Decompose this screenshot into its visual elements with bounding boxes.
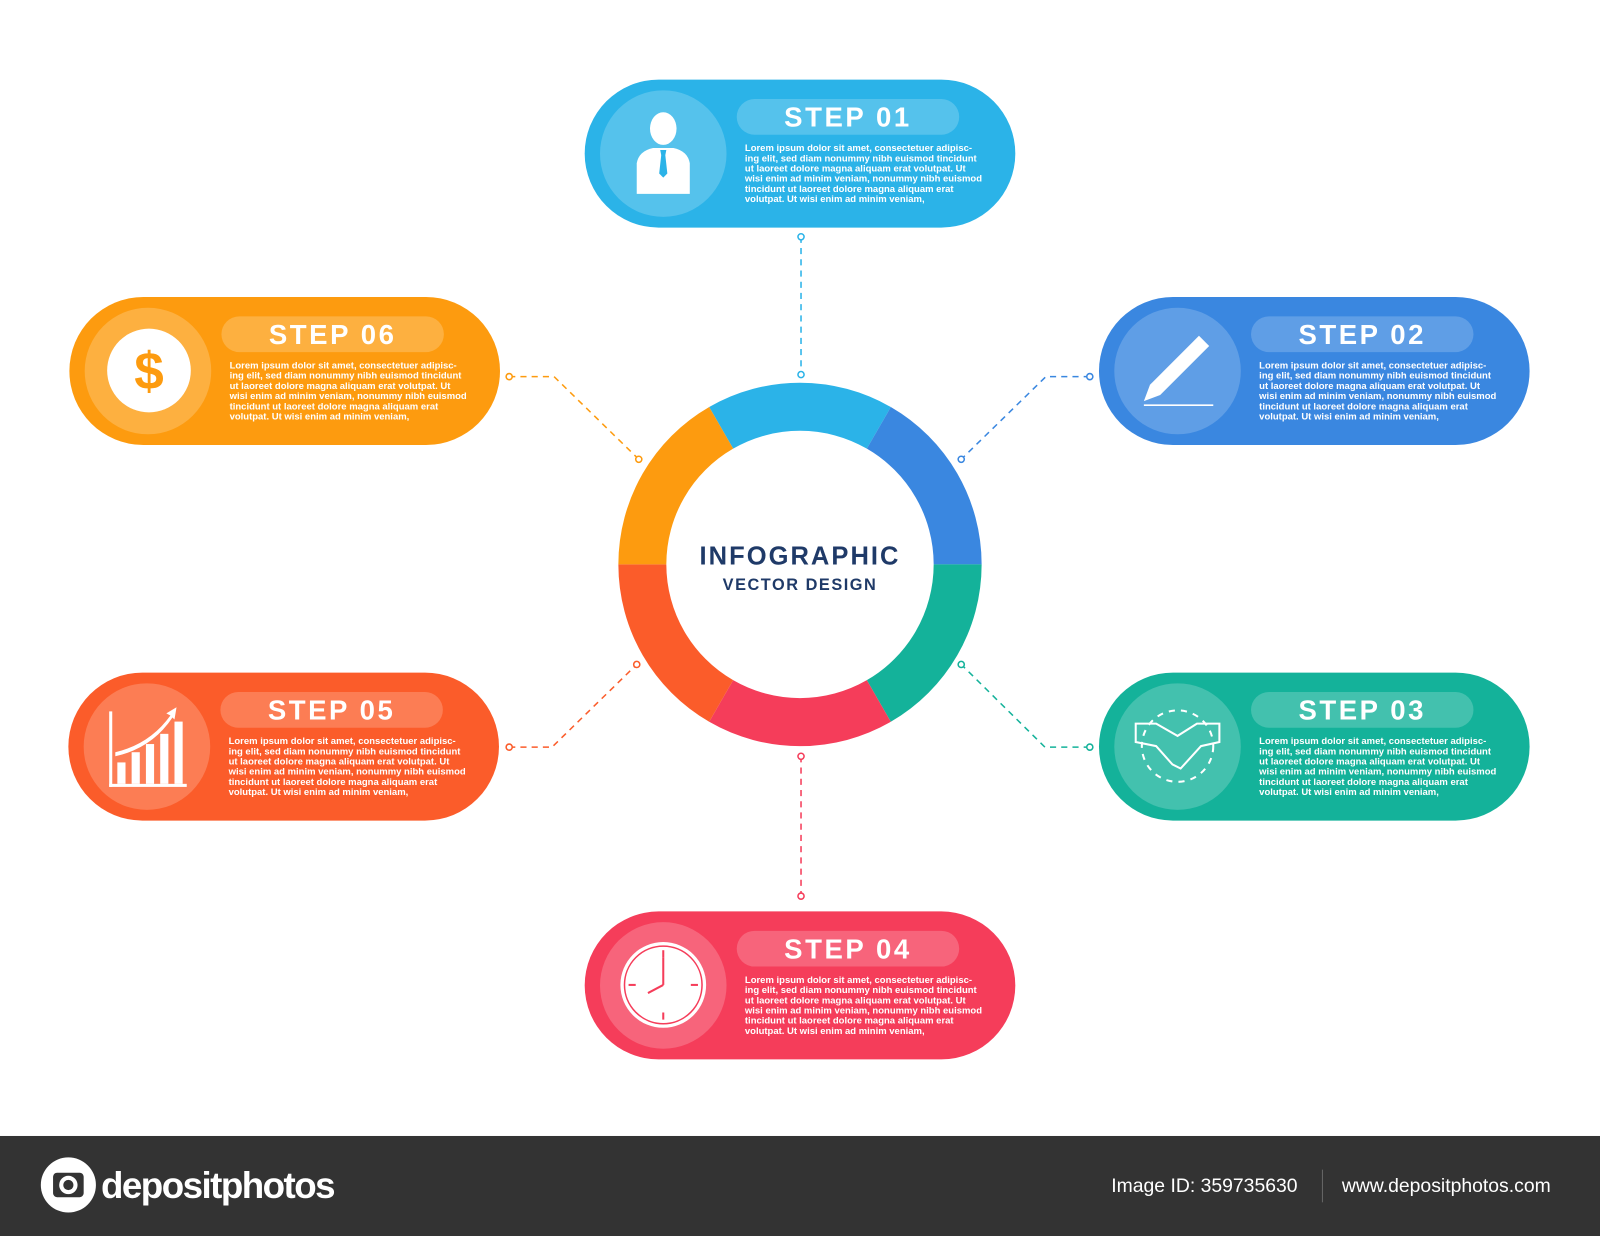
connector: step 02 (958, 374, 1093, 462)
panel: step 01 (585, 80, 1015, 228)
connector: step 05 (506, 661, 640, 750)
panel: step 05: STEP 05 (268, 695, 395, 726)
icon: bar chart (109, 707, 187, 787)
panel: step 02: STEP 02 (1298, 319, 1426, 350)
panel: step 04 (585, 911, 1015, 1059)
panel: step 03 (1099, 673, 1530, 821)
panel: step 06 (69, 297, 500, 445)
footer logo (41, 1157, 334, 1213)
panel: step 02 (1099, 297, 1530, 445)
icon: dollar: $ (134, 342, 164, 401)
panel: step 01: STEP 01 (784, 102, 912, 133)
center title: VECTOR DESIGN (723, 576, 877, 594)
icon: businessman (637, 112, 690, 194)
footer url: www.depositphotos.com (1341, 1175, 1551, 1197)
panel: step 04: STEP 04 (784, 933, 912, 964)
connector: step 04 (798, 753, 804, 899)
connector: step 03 (958, 661, 1093, 750)
center title (700, 542, 900, 594)
panel: step 06: STEP 06 (269, 319, 396, 350)
footer logo: depositphotos (101, 1165, 334, 1206)
icon: clock (620, 942, 706, 1028)
center title: INFOGRAPHIC (700, 542, 900, 570)
connector: step 06 (506, 374, 642, 462)
panel: step 05 (68, 673, 499, 821)
center ring (618, 383, 982, 746)
icon: pencil (1144, 336, 1213, 405)
panel: step 03: STEP 03 (1298, 695, 1426, 726)
footer image id: Image ID: 359735630 (1111, 1175, 1298, 1197)
connector: step 01 (798, 234, 804, 378)
footer bar (0, 1136, 1600, 1236)
icon: handshake (1136, 710, 1219, 782)
icon: dollar (107, 329, 191, 412)
